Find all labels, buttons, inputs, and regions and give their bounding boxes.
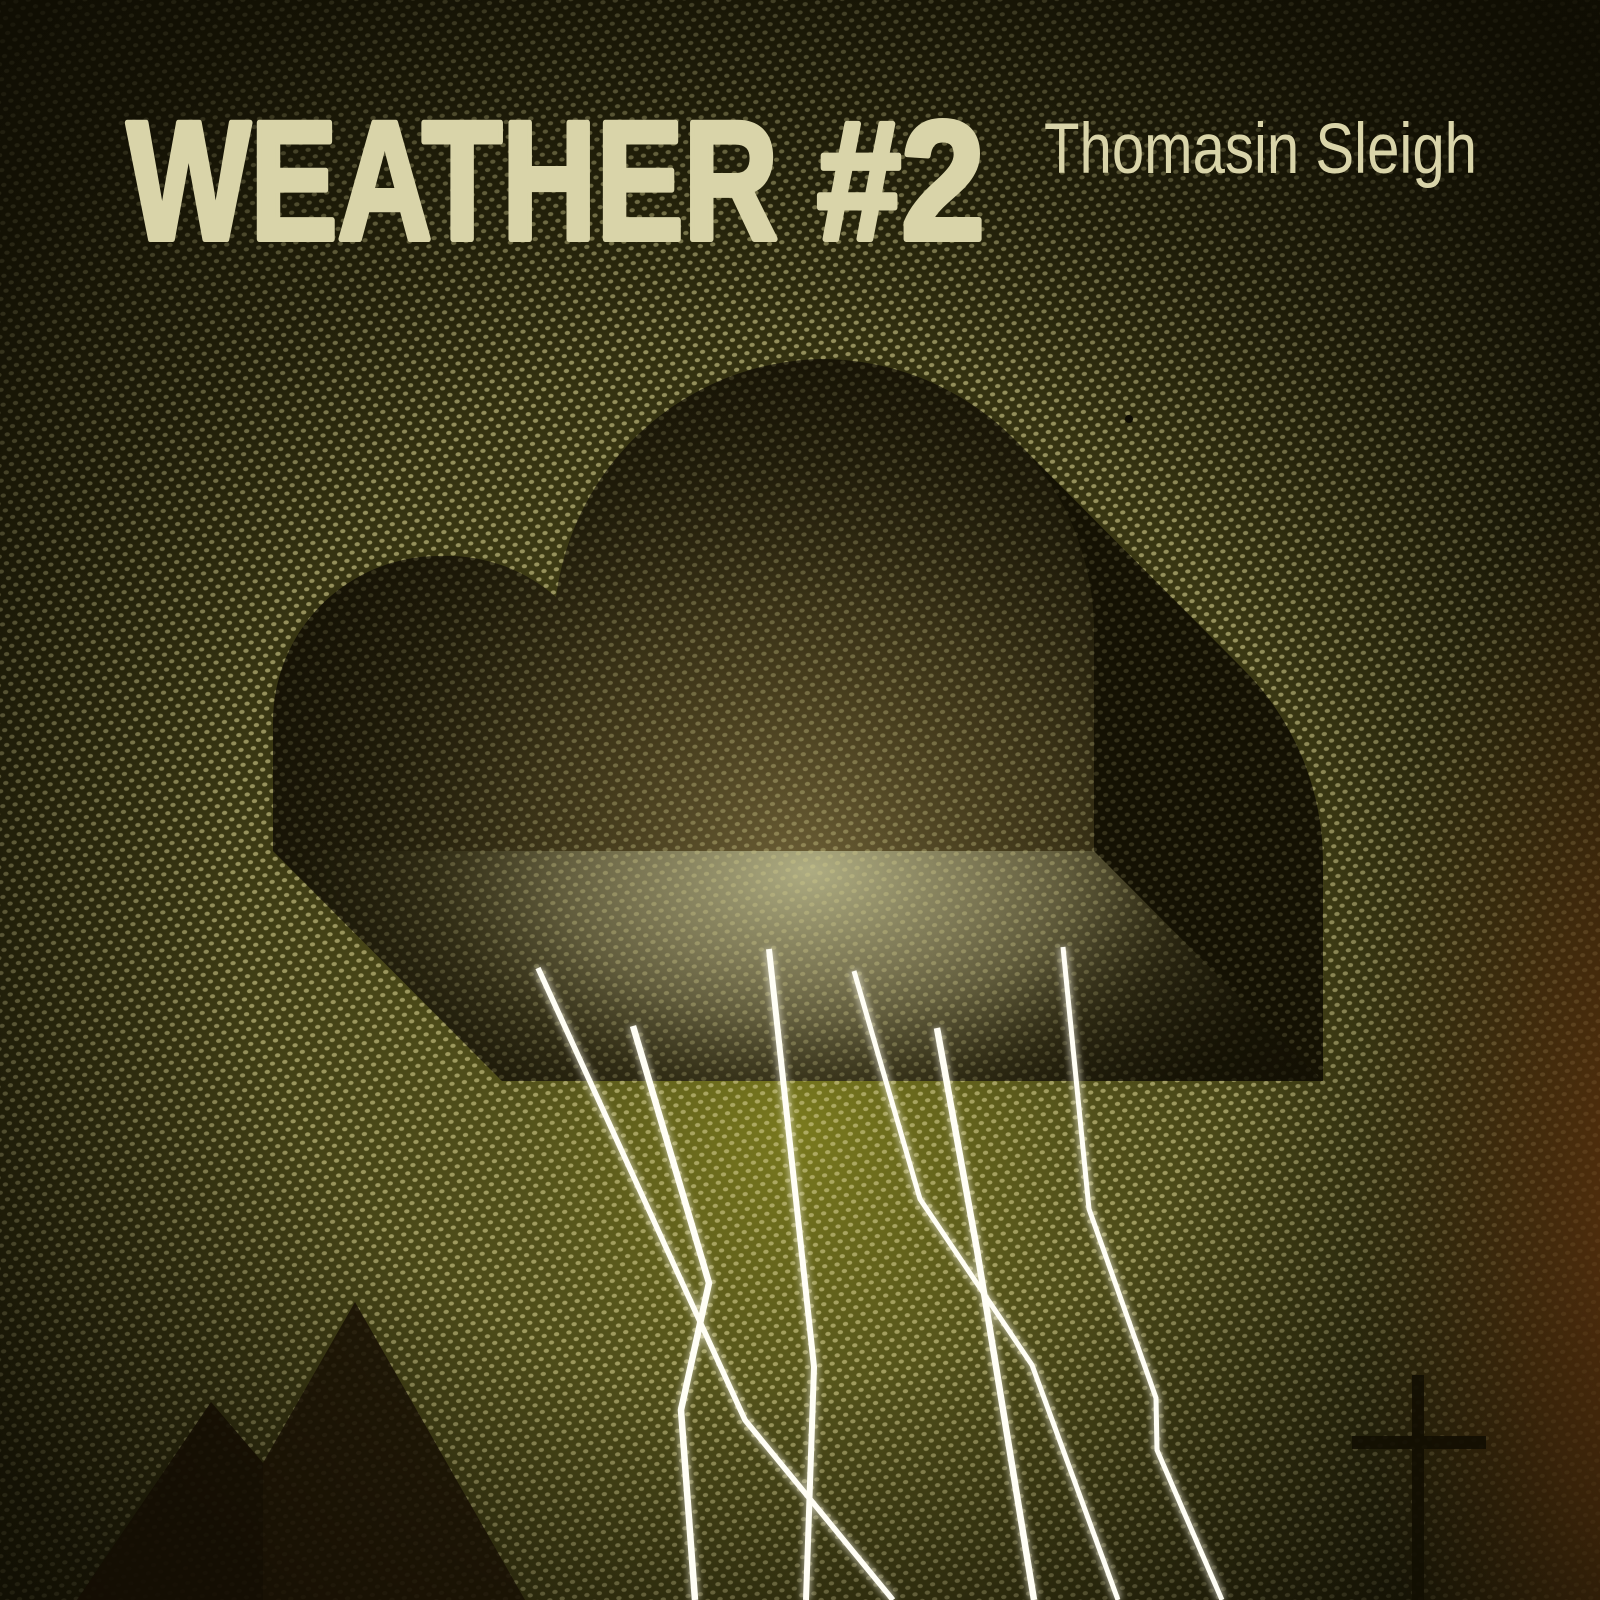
bolt 1 bbox=[538, 968, 893, 1600]
speck bbox=[1125, 415, 1133, 423]
title: #2 bbox=[817, 86, 985, 275]
cloud side face bbox=[1014, 439, 1323, 1081]
author name: Thomasin Sleigh bbox=[1044, 110, 1477, 189]
lightning glow bbox=[538, 947, 1222, 1600]
twin peaks bbox=[77, 1302, 525, 1600]
short peak shading bbox=[77, 1402, 263, 1600]
bolt 3 bbox=[769, 949, 814, 1600]
cloud: extruded 3D shape bbox=[273, 359, 1323, 1081]
cross bbox=[1352, 1375, 1486, 1600]
bolt 6 bbox=[1063, 947, 1222, 1600]
cloud underside, lit from below bbox=[273, 851, 1323, 1081]
mountains silhouette bbox=[77, 1302, 525, 1600]
lightning bolts bbox=[538, 947, 1222, 1600]
bolt 5 bbox=[937, 1028, 1034, 1600]
bolt 2 bbox=[633, 1026, 709, 1600]
cloud front face bbox=[273, 359, 1094, 851]
bolt 4 bbox=[854, 971, 1118, 1600]
title: WEATHER bbox=[127, 86, 778, 275]
